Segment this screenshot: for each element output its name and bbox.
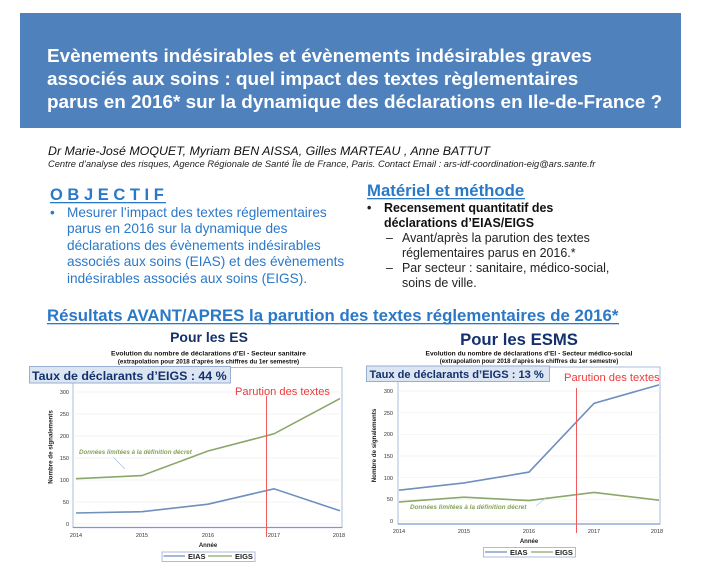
y axis labels: 300 bbox=[384, 389, 393, 395]
y axis labels: 250 bbox=[60, 412, 69, 418]
text: objectif body: • bbox=[50, 205, 55, 220]
text: methode body: – bbox=[386, 231, 393, 245]
line: EIAS bbox=[399, 385, 659, 490]
heading: pour les ESMS: Pour les ESMS bbox=[460, 330, 578, 349]
chart title: (extrapolation pour 2018 d’après les chiffres du 1er semestre) bbox=[440, 358, 618, 365]
line: EIGS bbox=[399, 492, 659, 502]
affiliation: Centre d’analyse des risques, Agence Régionale de Santé Île de France, Paris. Contact Email : ars-idf-coordination-eig@ars.sante.fr bbox=[48, 159, 596, 169]
text: methode body: – bbox=[386, 261, 393, 275]
x axis labels: 2017 bbox=[268, 533, 280, 539]
text: methode body: Par secteur : sanitaire, médico-social, bbox=[402, 261, 609, 275]
text: methode body: réglementaires parus en 2016.* bbox=[402, 246, 576, 260]
text: methode body: Recensement quantitatif des bbox=[384, 201, 553, 215]
x axis labels bbox=[70, 533, 345, 539]
y axis labels: 150 bbox=[384, 454, 393, 460]
y axis labels: 50 bbox=[387, 497, 393, 503]
panel: materiel et methode bbox=[367, 181, 609, 290]
heading: objectif: OBJECTIF bbox=[50, 186, 168, 204]
title: Evènements indésirables et évènements indésirables graves bbox=[47, 46, 592, 67]
arrow bbox=[114, 458, 125, 469]
x axis labels: 2014 bbox=[70, 533, 82, 539]
y axis labels: 300 bbox=[60, 390, 69, 396]
x axis labels: 2018 bbox=[333, 533, 345, 539]
line chart: ES bbox=[48, 368, 345, 562]
text: objectif body: parus en 2016 sur la dynamique des bbox=[67, 221, 288, 236]
y axis labels: 250 bbox=[384, 411, 393, 417]
x axis labels: 2018 bbox=[651, 529, 663, 535]
y axis labels: 200 bbox=[384, 432, 393, 438]
y axis labels: 50 bbox=[63, 500, 69, 506]
annotation: donnees limitees: Données limitées à la définition décret bbox=[79, 449, 193, 456]
text: objectif body: indésirables associés aux soins (EIGS). bbox=[67, 271, 307, 286]
chart title: Evolution du nombre de déclarations d’EI - Secteur médico-social bbox=[426, 350, 633, 358]
x axis labels: 2014 bbox=[393, 529, 405, 535]
text: objectif body: déclarations des évènements indésirables bbox=[67, 238, 321, 253]
heading: materiel et methode: Matériel et méthode bbox=[367, 181, 524, 200]
x axis labels: 2016 bbox=[523, 529, 535, 535]
y axis labels: 200 bbox=[60, 434, 69, 440]
title: associés aux soins : quel impact des textes règlementaires bbox=[47, 69, 578, 90]
marker: parution des textes: Parution des textes bbox=[564, 372, 660, 384]
title: parus en 2016* sur la dynamique des déclarations en Ile-de-France ? bbox=[47, 92, 662, 113]
legend bbox=[484, 548, 576, 557]
x axis labels bbox=[393, 529, 663, 535]
heading: results: Résultats AVANT/APRES la parution des textes réglementaires de 2016* bbox=[47, 306, 619, 325]
line chart: ESMS bbox=[371, 367, 663, 557]
y axis labels: 100 bbox=[60, 478, 69, 484]
text: methode body: déclarations d’EIAS/EIGS bbox=[384, 216, 534, 230]
y axis labels: 0 bbox=[66, 522, 69, 528]
x axis labels: 2017 bbox=[588, 529, 600, 535]
y axis labels: 0 bbox=[390, 519, 393, 525]
text: methode body: • bbox=[367, 201, 371, 215]
y axis labels: 100 bbox=[384, 476, 393, 482]
panel: chart ESMS bbox=[366, 330, 663, 557]
heading: pour les ES: Pour les ES bbox=[170, 329, 248, 345]
y axis title: Nombre de signalements bbox=[371, 408, 378, 482]
x axis labels: 2015 bbox=[458, 529, 470, 535]
chart title: Evolution du nombre de déclarations d’EI - Secteur sanitaire bbox=[111, 350, 306, 358]
x axis labels: 2015 bbox=[136, 533, 148, 539]
legend: EIAS bbox=[188, 552, 206, 561]
chart title: (extrapolation pour 2018 d’après les chiffres du 1er semestre) bbox=[118, 358, 299, 366]
text: methode body bbox=[367, 201, 609, 290]
y axis title: Nombre de signalements bbox=[48, 410, 54, 484]
y axis labels bbox=[384, 389, 393, 525]
callout: taux ESMS: Taux de déclarants d’EIGS : 13 % bbox=[370, 369, 544, 381]
x axis title: Année bbox=[520, 539, 539, 545]
text: objectif body: associés aux soins (EIAS) et des évènements bbox=[67, 254, 344, 269]
text: methode body: soins de ville. bbox=[402, 276, 477, 290]
x axis title: Année bbox=[199, 543, 218, 549]
annotation: donnees limitees: Données limitées à la définition décret bbox=[410, 504, 527, 511]
marker: parution des textes: Parution des textes bbox=[235, 386, 330, 398]
line: EIAS bbox=[76, 489, 340, 513]
panel: chart ES bbox=[30, 329, 345, 562]
panel: objectif bbox=[50, 186, 344, 286]
y axis labels bbox=[60, 390, 69, 528]
legend: EIAS bbox=[510, 548, 528, 557]
authors: Dr Marie-José MOQUET, Myriam BEN AISSA, Gilles MARTEAU , Anne BATTUT bbox=[48, 144, 492, 158]
panel: title banner bbox=[20, 13, 681, 128]
legend bbox=[162, 552, 255, 562]
y axis labels: 150 bbox=[60, 456, 69, 462]
legend: EIGS bbox=[235, 552, 253, 561]
x axis labels: 2016 bbox=[202, 533, 214, 539]
text: methode body: Avant/après la parution des textes bbox=[402, 231, 590, 245]
legend: EIGS bbox=[555, 548, 573, 557]
callout: taux ES: Taux de déclarants d’EIGS : 44 % bbox=[32, 369, 227, 383]
text: objectif body: Mesurer l’impact des textes réglementaires bbox=[67, 205, 327, 220]
arrow bbox=[536, 497, 547, 506]
line: EIGS bbox=[76, 399, 340, 479]
